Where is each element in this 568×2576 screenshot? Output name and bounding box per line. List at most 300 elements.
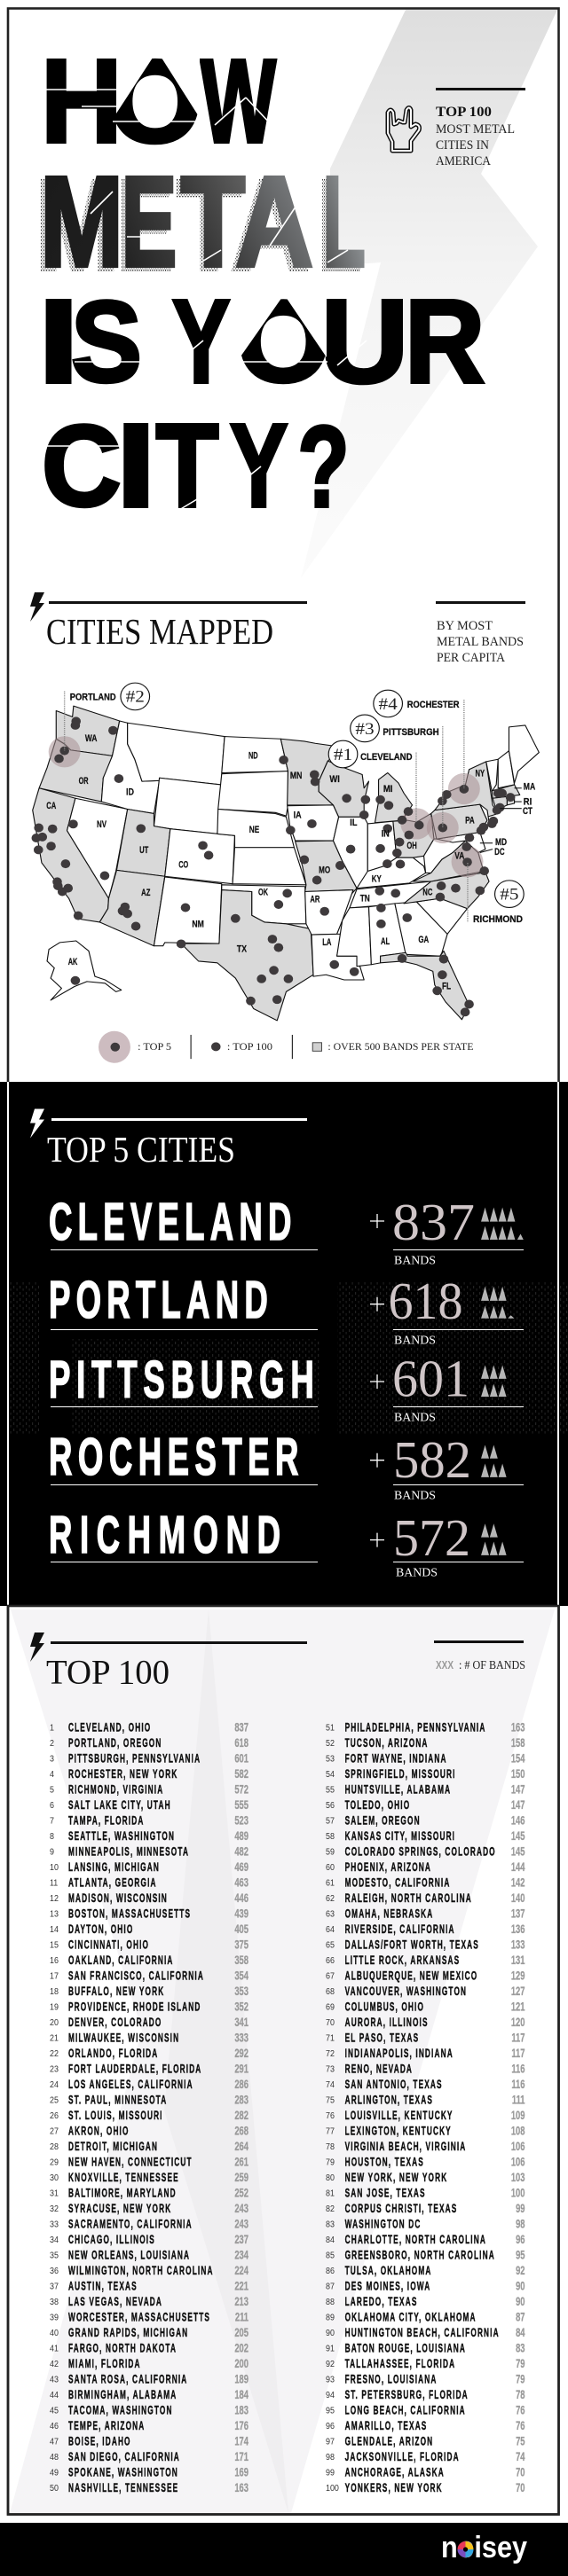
list column: band counts 1 to 50: 489 xyxy=(234,1828,248,1843)
list column: cities 1 to 50: SALT LAKE CITY, UTAH xyxy=(68,1799,171,1812)
state labels: RI xyxy=(524,797,532,807)
list column: ranks 51 to 100: 92 xyxy=(326,2359,335,2369)
callout: Cleveland #1 xyxy=(328,740,413,768)
subtitle block: TOP 100 xyxy=(436,105,492,120)
list column: band counts 1 to 50: 213 xyxy=(234,2294,248,2308)
list column: cities 1 to 50: NEW HAVEN, CONNECTICUT xyxy=(68,2156,193,2169)
list column: ranks 51 to 100: 61 xyxy=(326,1878,335,1889)
list column: ranks 51 to 100: 96 xyxy=(326,2421,335,2431)
list column: ranks 51 to 100: 81 xyxy=(326,2188,335,2199)
bands labels: BANDS xyxy=(394,1333,436,1346)
list column: ranks 1 to 50: 18 xyxy=(50,1986,59,1997)
footer band with noisey logo: noisey xyxy=(441,2531,527,2564)
list column: cities 1 to 50: PORTLAND, OREGON xyxy=(68,1737,162,1750)
list column: cities 51 to 100: TULSA, OKLAHOMA xyxy=(345,2265,432,2277)
list column: ranks 1 to 50: 35 xyxy=(50,2251,59,2261)
list column: ranks 51 to 100: 98 xyxy=(326,2452,335,2462)
list column: ranks 51 to 100: 68 xyxy=(326,1986,335,1997)
list column: cities 1 to 50: RICHMOND, VIRGINIA xyxy=(68,1783,163,1797)
list column: band counts 51 to 100: 121 xyxy=(511,1999,525,2014)
footer band with noisey logo xyxy=(0,2523,568,2576)
state labels: KY xyxy=(372,874,382,884)
list column: ranks 51 to 100: 56 xyxy=(326,1800,335,1811)
list column: band counts 1 to 50: 252 xyxy=(234,2185,248,2200)
city names: RICHMOND xyxy=(49,1507,280,1564)
list column: ranks 1 to 50: 8 xyxy=(50,1831,54,1842)
list column: cities 51 to 100: ALBUQUERQUE, NEW MEXICO xyxy=(345,1969,477,1983)
list column: cities 1 to 50: PITTSBURGH, PENNSYLVANIA xyxy=(68,1752,201,1766)
list column: ranks 51 to 100: 94 xyxy=(326,2390,335,2400)
list column: ranks 1 to 50: 25 xyxy=(50,2095,59,2106)
band counts xyxy=(389,1193,475,1567)
list column: cities 1 to 50: DENVER, COLORADO xyxy=(68,2016,162,2029)
list column: band counts 51 to 100: 120 xyxy=(511,2015,525,2029)
list column: band counts 1 to 50: 243 xyxy=(234,2216,248,2231)
list column: cities 1 to 50 xyxy=(68,1721,214,2494)
list column: ranks 1 to 50: 6 xyxy=(50,1800,54,1811)
list column: ranks 1 to 50: 7 xyxy=(50,1816,54,1827)
list column: ranks 1 to 50: 36 xyxy=(50,2266,59,2276)
state labels: AK xyxy=(68,957,77,967)
list column: band counts 1 to 50: 174 xyxy=(234,2433,248,2448)
list column: ranks 51 to 100: 55 xyxy=(326,1785,335,1796)
list column: ranks 1 to 50: 26 xyxy=(50,2110,59,2121)
state labels: CT xyxy=(523,806,532,817)
list column: cities 51 to 100: INDIANAPOLIS, INDIANA xyxy=(345,2047,454,2060)
list column: cities 1 to 50: MILWAUKEE, WISCONSIN xyxy=(68,2032,179,2045)
list column: ranks 51 to 100: 71 xyxy=(326,2033,335,2044)
key: number of bands xyxy=(434,1640,525,1672)
list column: ranks 1 to 50: 27 xyxy=(50,2126,59,2137)
list column: ranks 1 to 50: 39 xyxy=(50,2313,59,2323)
city names: CLEVELAND xyxy=(49,1194,291,1251)
panel: top 100 xyxy=(10,1609,555,2513)
list column: ranks 51 to 100: 97 xyxy=(326,2437,335,2447)
list column: band counts 51 to 100: 108 xyxy=(511,2123,525,2138)
state labels: NE xyxy=(249,825,259,835)
list column: band counts 1 to 50: 469 xyxy=(234,1860,248,1874)
list column: cities 51 to 100: DALLAS/FORT WORTH, TEXAS xyxy=(345,1938,479,1952)
title: How Metal Is Your City: Y xyxy=(172,275,230,408)
black background xyxy=(0,1082,568,1606)
band counts: 572 xyxy=(393,1508,470,1567)
states xyxy=(33,706,539,1021)
heading: top 5 cities: TOP 5 CITIES xyxy=(47,1129,235,1170)
state labels: AL xyxy=(381,936,390,947)
list column: cities 51 to 100: RALEIGH, NORTH CAROLINA xyxy=(345,1892,472,1905)
list column: ranks 1 to 50: 13 xyxy=(50,1909,59,1920)
list column: cities 1 to 50: OAKLAND, CALIFORNIA xyxy=(68,1954,174,1967)
list column: band counts 51 to 100: 145 xyxy=(511,1844,525,1859)
list column: ranks 1 to 50: 12 xyxy=(50,1893,59,1904)
list column: cities 1 to 50: LOS ANGELES, CALIFORNIA xyxy=(68,2079,193,2091)
list column: ranks 51 to 100: 79 xyxy=(326,2157,335,2168)
legend: : OVER 500 BANDS PER STATE xyxy=(327,1041,473,1053)
bands labels: BANDS xyxy=(396,1566,438,1579)
list column: ranks 1 to 50: 37 xyxy=(50,2282,59,2292)
callout: Pittsburgh #3 xyxy=(351,715,439,742)
list column: ranks 51 to 100: 58 xyxy=(326,1831,335,1842)
list column: band counts 51 to 100: 129 xyxy=(511,1968,525,1983)
list column: band counts 1 to 50: 618 xyxy=(234,1735,248,1750)
title: How Metal Is Your City: I xyxy=(38,275,79,407)
list column: ranks 51 to 100: 70 xyxy=(326,2017,335,2028)
list column: cities 51 to 100: LAREDO, TEXAS xyxy=(345,2296,417,2308)
list column: cities 1 to 50: ATLANTA, GEORGIA xyxy=(68,1876,157,1890)
list column: cities 51 to 100: PHILADELPHIA, PENNSYLVANIA xyxy=(345,1721,485,1734)
list column: band counts 1 to 50: 163 xyxy=(234,2480,248,2494)
list column: cities 51 to 100: FORT WAYNE, INDIANA xyxy=(345,1752,447,1766)
state labels: AR xyxy=(310,895,320,905)
list column: cities 51 to 100: CORPUS CHRISTI, TEXAS xyxy=(345,2203,457,2215)
list column: band counts 51 to 100: 145 xyxy=(511,1828,525,1843)
list column: cities 51 to 100: ST. PETERSBURG, FLORIDA xyxy=(345,2389,469,2401)
list column: ranks 1 to 50: 50 xyxy=(50,2483,59,2494)
callout: Cleveland #1: CLEVELAND xyxy=(360,750,413,763)
list column: ranks 1 to 50: 40 xyxy=(50,2328,59,2338)
list column: ranks 1 to 50: 11 xyxy=(50,1878,58,1889)
list column: band counts 51 to 100: 117 xyxy=(511,2046,525,2060)
list column: ranks 1 to 50: 19 xyxy=(50,2002,59,2013)
list column: cities 1 to 50: DETROIT, MICHIGAN xyxy=(68,2141,158,2153)
list column: cities 1 to 50: ROCHESTER, NEW YORK xyxy=(68,1768,178,1781)
title: How Metal Is Your City xyxy=(36,35,485,532)
list column: ranks 1 to 50: 44 xyxy=(50,2390,59,2400)
list column: band counts 1 to 50: 200 xyxy=(234,2356,248,2370)
list column: cities 51 to 100: TALLAHASSEE, FLORIDA xyxy=(345,2358,455,2370)
list column: band counts 51 to 100: 142 xyxy=(511,1875,525,1890)
list column: band counts 1 to 50: 837 xyxy=(234,1719,248,1734)
list column: ranks 1 to 50: 17 xyxy=(50,1971,59,1982)
list column: ranks 1 to 50: 5 xyxy=(50,1785,54,1796)
list column: cities 1 to 50: SYRACUSE, NEW YORK xyxy=(68,2203,171,2215)
bands labels xyxy=(394,1254,438,1579)
list column: cities 51 to 100: SAN JOSE, TEXAS xyxy=(345,2187,426,2200)
list column: ranks 1 to 50: 41 xyxy=(50,2344,59,2354)
list column: ranks 1 to 50: 42 xyxy=(50,2359,59,2369)
title: How Metal Is Your City: M xyxy=(36,153,119,297)
map subtitle: PER CAPITA xyxy=(437,651,505,665)
state labels: VA xyxy=(454,851,464,861)
callout: Pittsburgh #3: PITTSBURGH xyxy=(383,725,439,738)
list column: ranks 51 to 100: 65 xyxy=(326,1940,335,1951)
list column: cities 51 to 100: YONKERS, NEW YORK xyxy=(345,2482,443,2494)
callout: Cleveland #1: #1 xyxy=(334,746,352,764)
list column: band counts 1 to 50: 259 xyxy=(234,2170,248,2184)
list column: band counts 51 to 100: 92 xyxy=(516,2263,525,2277)
state labels: CA xyxy=(46,801,56,811)
subtitle block: CITIES IN xyxy=(436,138,489,153)
state labels: WA xyxy=(85,733,97,744)
list column: cities 51 to 100: VIRGINIA BEACH, VIRGINIA xyxy=(345,2141,466,2153)
list column: ranks 1 to 50: 20 xyxy=(50,2017,59,2028)
list column: cities 1 to 50: NEW ORLEANS, LOUISIANA xyxy=(68,2249,190,2262)
list column: band counts 51 to 100: 106 xyxy=(511,2154,525,2169)
key: number of bands: : # OF BANDS xyxy=(459,1658,525,1672)
list column: ranks 51 to 100 xyxy=(326,1723,339,2494)
state labels: IA xyxy=(294,810,302,820)
list column: band counts 51 to 100: 79 xyxy=(516,2371,525,2386)
list column: cities 51 to 100: EL PASO, TEXAS xyxy=(345,2032,419,2045)
icon: colour wheel in logo xyxy=(458,2541,474,2557)
list column: ranks 1 to 50: 48 xyxy=(50,2452,59,2462)
white frame lines xyxy=(7,1082,559,1606)
map subtitle xyxy=(436,601,525,665)
list column: ranks 1 to 50: 9 xyxy=(50,1847,54,1858)
list column: cities 51 to 100: GLENDALE, ARIZON xyxy=(345,2435,433,2448)
list column: cities 51 to 100: WASHINGTON DC xyxy=(345,2218,421,2231)
state labels: NV xyxy=(97,819,106,830)
bands labels: BANDS xyxy=(394,1489,436,1502)
list column: cities 1 to 50: BOISE, IDAHO xyxy=(68,2435,131,2448)
list column: cities 51 to 100: HUNTSVILLE, ALABAMA xyxy=(345,1783,451,1797)
list column: ranks 1 to 50: 28 xyxy=(50,2141,59,2152)
list column: cities 51 to 100: HUNTINGTON BEACH, CALIFORNIA xyxy=(345,2327,500,2339)
list column: cities 1 to 50: TACOMA, WASHINGTON xyxy=(68,2404,173,2417)
list column: cities 1 to 50: CHICAGO, ILLINOIS xyxy=(68,2234,155,2246)
list column: band counts 1 to 50: 171 xyxy=(234,2449,248,2463)
legend: : TOP 100 xyxy=(227,1041,272,1053)
title: How Metal Is Your City: ? xyxy=(298,403,350,532)
list column: cities 1 to 50: SANTA ROSA, CALIFORNIA xyxy=(68,2373,187,2386)
list column: ranks 1 to 50: 4 xyxy=(50,1769,54,1780)
list column: band counts 1 to 50: 283 xyxy=(234,2092,248,2107)
list column: band counts 1 to 50: 405 xyxy=(234,1922,248,1936)
list column: band counts 51 to 100: 98 xyxy=(516,2216,525,2231)
list column: ranks 51 to 100: 87 xyxy=(326,2282,335,2292)
list column: cities 1 to 50: WORCESTER, MASSACHUSETTS xyxy=(68,2311,210,2324)
list column: ranks 51 to 100: 80 xyxy=(326,2173,335,2183)
list column: cities 51 to 100: CHARLOTTE, NORTH CAROLINA xyxy=(345,2234,486,2246)
title: How Metal Is Your City: M xyxy=(40,149,123,294)
list column: band counts 51 to 100: 106 xyxy=(511,2139,525,2153)
list column: band counts 1 to 50: 264 xyxy=(234,2139,248,2153)
list column: cities 51 to 100: DES MOINES, IOWA xyxy=(345,2280,430,2293)
list column: cities 1 to 50: MIAMI, FLORIDA xyxy=(68,2358,141,2370)
list column: cities 1 to 50: MADISON, WISCONSIN xyxy=(68,1892,168,1905)
list column: cities 51 to 100: BATON ROUGE, LOUISIANA xyxy=(345,2342,466,2355)
list column: band counts 51 to 100: 99 xyxy=(516,2201,525,2215)
callout: Rochester #4: #4 xyxy=(379,695,398,714)
list column: band counts 1 to 50: 205 xyxy=(234,2325,248,2339)
callout leader lines xyxy=(65,692,468,922)
list column: band counts 1 to 50: 482 xyxy=(234,1844,248,1859)
list column: ranks 51 to 100: 52 xyxy=(326,1738,335,1749)
list column: cities 51 to 100: RIVERSIDE, CALIFORNIA xyxy=(345,1923,455,1936)
state labels xyxy=(46,733,535,991)
list column: ranks 1 to 50: 30 xyxy=(50,2173,59,2183)
list column: band counts 51 to 100: 96 xyxy=(516,2232,525,2246)
map subtitle: METAL BANDS xyxy=(437,635,524,649)
title: How Metal Is Your City: E xyxy=(121,149,177,294)
list column: ranks 51 to 100: 69 xyxy=(326,2002,335,2013)
list column: cities 51 to 100: LONG BEACH, CALIFORNIA xyxy=(345,2404,466,2417)
list column: band counts 51 to 100: 133 xyxy=(511,1937,525,1952)
list column: cities 51 to 100: SALEM, OREGON xyxy=(345,1814,421,1828)
heading: top 100: TOP 100 xyxy=(46,1654,170,1692)
state labels: PA xyxy=(465,816,475,826)
list column: ranks 51 to 100: 54 xyxy=(326,1769,335,1780)
list column: band counts 1 to 50: 243 xyxy=(234,2201,248,2215)
background bolts xyxy=(10,1609,555,2513)
list column: cities 51 to 100: HOUSTON, TEXAS xyxy=(345,2156,424,2169)
list column: cities 51 to 100: OMAHA, NEBRASKA xyxy=(345,1907,433,1921)
list column: band counts 51 to 100: 84 xyxy=(516,2325,525,2339)
list column: band counts 1 to 50: 221 xyxy=(234,2278,248,2293)
list column: cities 51 to 100: AMARILLO, TEXAS xyxy=(345,2420,427,2432)
state labels: FL xyxy=(442,982,451,991)
list column: band counts 1 to 50: 582 xyxy=(234,1766,248,1781)
list column: ranks 51 to 100: 67 xyxy=(326,1971,335,1982)
state labels: MA xyxy=(524,782,535,793)
list column: cities 1 to 50: SAN DIEGO, CALIFORNIA xyxy=(68,2451,180,2463)
title: How Metal Is Your City: T xyxy=(156,399,218,532)
list column: band counts 1 to 50: 202 xyxy=(234,2340,248,2355)
list column: cities 1 to 50: FARGO, NORTH DAKOTA xyxy=(68,2342,177,2355)
list column: band counts 1 to 50: 286 xyxy=(234,2077,248,2091)
list column: cities 1 to 50: ORLANDO, FLORIDA xyxy=(68,2047,158,2060)
key: number of bands: XXX xyxy=(436,1658,454,1672)
list column: ranks 51 to 100: 83 xyxy=(326,2220,335,2230)
list column: cities 51 to 100: SPRINGFIELD, MISSOURI xyxy=(345,1768,456,1781)
list column: cities 51 to 100: AURORA, ILLINOIS xyxy=(345,2016,429,2029)
callout: Portland #2: PORTLAND xyxy=(70,691,116,702)
icon: bolt xyxy=(30,1633,44,1662)
list column: cities 51 to 100: LOUISVILLE, KENTUCKY xyxy=(345,2110,454,2122)
list column: cities 1 to 50: BOSTON, MASSACHUSETTS xyxy=(68,1907,191,1921)
list column: cities 51 to 100 xyxy=(345,1721,500,2494)
list column: band counts 1 to 50: 354 xyxy=(234,1968,248,1983)
list column: cities 1 to 50: BALTIMORE, MARYLAND xyxy=(68,2187,177,2200)
title: How Metal Is Your City: S xyxy=(71,278,142,406)
list column: cities 51 to 100: ARLINGTON, TEXAS xyxy=(345,2094,433,2107)
state labels: UT xyxy=(139,846,149,856)
state labels: MI xyxy=(383,784,392,795)
list column: band counts 51 to 100: 90 xyxy=(516,2278,525,2293)
list column: cities 1 to 50: LANSING, MICHIGAN xyxy=(68,1861,160,1874)
list column: cities 51 to 100: VANCOUVER, WASHINGTON xyxy=(345,1985,467,1998)
title: How Metal Is Your City: A xyxy=(235,151,313,294)
list column: cities 51 to 100: GREENSBORO, NORTH CAROLINA xyxy=(345,2249,495,2262)
list column: ranks 1 to 50: 3 xyxy=(50,1754,54,1765)
callout: Richmond #5: #5 xyxy=(500,885,519,904)
list column: cities 51 to 100: SAN ANTONIO, TEXAS xyxy=(345,2079,443,2091)
list column: ranks 1 to 50: 24 xyxy=(50,2079,59,2090)
list column: ranks 51 to 100: 77 xyxy=(326,2126,335,2137)
list column: band counts 51 to 100: 75 xyxy=(516,2433,525,2448)
list column: ranks 1 to 50: 47 xyxy=(50,2437,59,2447)
list column: ranks 1 to 50: 43 xyxy=(50,2375,59,2385)
list column: band counts 1 to 50: 352 xyxy=(234,1999,248,2014)
state labels: GA xyxy=(418,935,429,945)
list column: ranks 1 to 50 xyxy=(50,1723,59,2494)
list column: cities 1 to 50: CINCINNATI, OHIO xyxy=(68,1938,149,1952)
list column: cities 51 to 100: LEXINGTON, KENTUCKY xyxy=(345,2125,452,2138)
list column: band counts 1 to 50: 291 xyxy=(234,2061,248,2076)
list column: ranks 51 to 100: 95 xyxy=(326,2406,335,2416)
list column: cities 1 to 50: KNOXVILLE, TENNESSEE xyxy=(68,2172,179,2184)
list column: cities 51 to 100: COLUMBUS, OHIO xyxy=(345,2001,424,2014)
list column: band counts 51 to 100: 79 xyxy=(516,2356,525,2370)
list column: ranks 51 to 100: 72 xyxy=(326,2048,335,2059)
list column: ranks 1 to 50: 29 xyxy=(50,2157,59,2168)
legend xyxy=(99,1031,473,1063)
list column: band counts 51 to 100: 154 xyxy=(511,1750,525,1766)
icon: bolt xyxy=(30,592,44,622)
list column: cities 1 to 50: FORT LAUDERDALE, FLORIDA xyxy=(68,2063,201,2076)
speckled texture xyxy=(7,1282,568,1435)
state labels: WI xyxy=(329,774,340,785)
list column: cities 1 to 50: DAYTON, OHIO xyxy=(68,1923,133,1936)
list column: cities 1 to 50: TAMPA, FLORIDA xyxy=(68,1814,144,1828)
band counts: 837 xyxy=(392,1193,475,1251)
list column: cities 1 to 50: AKRON, OHIO xyxy=(68,2125,130,2138)
list column: band counts 51 to 100: 147 xyxy=(511,1797,525,1812)
list column: ranks 51 to 100: 90 xyxy=(326,2328,335,2338)
list column: cities 1 to 50: CLEVELAND, OHIO xyxy=(68,1721,151,1734)
title: How Metal Is Your City: T xyxy=(177,154,241,298)
list column: cities 1 to 50: ST. PAUL, MINNESOTA xyxy=(68,2094,167,2107)
list column: band counts 1 to 50 xyxy=(234,1719,248,2494)
title: How Metal Is Your City: L xyxy=(319,153,361,297)
city names: PITTSBURGH xyxy=(49,1351,314,1409)
list column: band counts 1 to 50: 282 xyxy=(234,2108,248,2122)
list column: cities 1 to 50: BIRMINGHAM, ALABAMA xyxy=(68,2389,177,2401)
list column: ranks 1 to 50: 31 xyxy=(50,2188,59,2199)
list column: cities 51 to 100: FRESNO, LOUISIANA xyxy=(345,2373,437,2386)
list column: ranks 1 to 50: 46 xyxy=(50,2421,59,2431)
list column: band counts 51 to 100: 116 xyxy=(511,2061,525,2076)
list column: band counts 51 to 100: 163 xyxy=(511,1719,525,1734)
list column: ranks 1 to 50: 45 xyxy=(50,2406,59,2416)
bands labels: BANDS xyxy=(394,1411,436,1424)
list column: band counts 1 to 50: 224 xyxy=(234,2263,248,2277)
list column: cities 1 to 50: SACRAMENTO, CALIFORNIA xyxy=(68,2218,193,2231)
list column: band counts 51 to 100: 136 xyxy=(511,1922,525,1936)
list column: cities 1 to 50: AUSTIN, TEXAS xyxy=(68,2280,138,2293)
state labels: OR xyxy=(79,776,89,787)
list column: ranks 51 to 100: 57 xyxy=(326,1816,335,1827)
list column: cities 1 to 50: LAS VEGAS, NEVADA xyxy=(68,2296,162,2308)
list column: ranks 51 to 100: 66 xyxy=(326,1955,335,1966)
state labels: AZ xyxy=(141,888,151,898)
list column: cities 1 to 50: TEMPE, ARIZONA xyxy=(68,2420,145,2432)
title: How Metal Is Your City: I xyxy=(116,400,155,532)
list column: band counts 51 to 100 xyxy=(511,1719,525,2494)
list column: cities 51 to 100: LITTLE ROCK, ARKANSAS xyxy=(345,1954,460,1967)
list column: ranks 1 to 50: 2 xyxy=(50,1738,54,1749)
section rule xyxy=(51,1641,307,1644)
list column: cities 1 to 50: NASHVILLE, TENNESSEE xyxy=(68,2482,178,2494)
list column: cities 51 to 100: KANSAS CITY, MISSOURI xyxy=(345,1830,455,1843)
title: How Metal Is Your City: O xyxy=(236,278,330,406)
list column: cities 1 to 50: GRAND RAPIDS, MICHIGAN xyxy=(68,2327,188,2339)
list column: ranks 51 to 100: 91 xyxy=(326,2344,335,2354)
list column: ranks 51 to 100: 82 xyxy=(326,2204,335,2214)
callout: Pittsburgh #3: #3 xyxy=(355,719,375,739)
panel: cities mapped xyxy=(30,592,539,1063)
list column: band counts 1 to 50: 353 xyxy=(234,1984,248,1998)
city names: PORTLAND xyxy=(49,1272,268,1329)
list column: band counts 1 to 50: 183 xyxy=(234,2402,248,2417)
list column: band counts 51 to 100: 116 xyxy=(511,2077,525,2091)
list column: band counts 1 to 50: 176 xyxy=(234,2418,248,2432)
list column: ranks 51 to 100: 63 xyxy=(326,1909,335,1920)
list column: cities 51 to 100: TUCSON, ARIZONA xyxy=(345,1737,429,1750)
list column: band counts 1 to 50: 601 xyxy=(234,1750,248,1766)
list column: band counts 51 to 100: 144 xyxy=(511,1860,525,1874)
list column: cities 51 to 100: OKLAHOMA CITY, OKLAHOMA xyxy=(345,2311,477,2324)
